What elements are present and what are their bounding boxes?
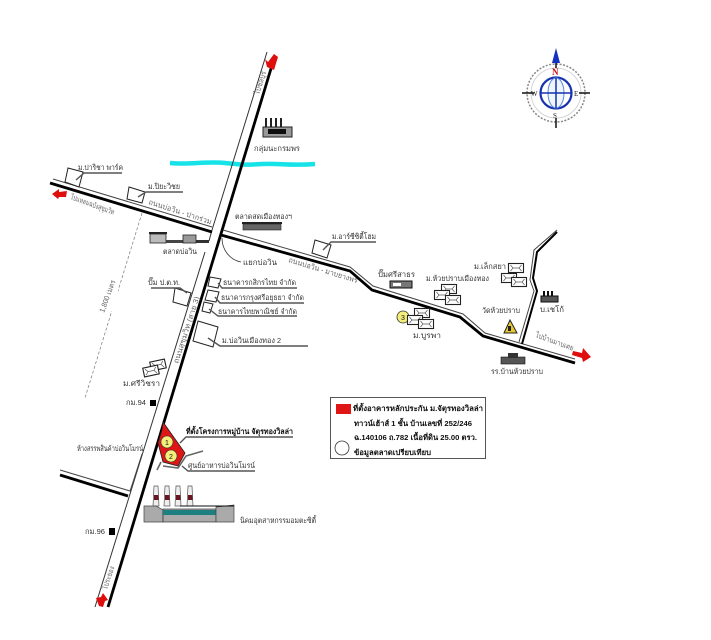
legend box bbox=[330, 398, 486, 458]
label: km 94: กม.94 bbox=[126, 398, 146, 407]
house: Paricha Park bbox=[65, 168, 83, 187]
compass bbox=[522, 48, 590, 128]
label: Amata City: นิคมอุตสาหกรรมอมตะซิตี้ bbox=[240, 515, 317, 525]
icon: school bbox=[501, 353, 525, 364]
bank: Kasikorn bbox=[208, 277, 221, 288]
marker 1: 1 bbox=[165, 440, 169, 447]
label: shopping mall: ห้างสรรพสินค้าบ่อวินโมรน์ bbox=[77, 444, 143, 453]
label: road to south: ไประยอง bbox=[100, 565, 116, 591]
label: Krungsri: ธนาคารกรุงศรีอยุธยา จำกัด bbox=[221, 293, 304, 302]
label: Bo Win market: ตลาดบ่อวิน bbox=[163, 247, 197, 256]
house: PTT station bbox=[173, 288, 191, 306]
arrow: east bbox=[572, 348, 591, 362]
dashed distance line bbox=[85, 213, 142, 398]
houses: Huai Prap Muang Thong bbox=[434, 284, 460, 304]
compass: N bbox=[552, 67, 559, 77]
leader: food centre bbox=[182, 466, 255, 471]
label: Bo Win junction: แยกบ่อวิน bbox=[243, 258, 277, 267]
icon: Muang Thong market bbox=[242, 222, 282, 230]
label: Sukhumvit highway: ถนนสุขุมวิท (สาย 3) bbox=[171, 295, 202, 365]
label: 1,800 m: 1,800 เมตร bbox=[97, 279, 118, 314]
road: main north-south highway bbox=[95, 52, 273, 607]
compass: S bbox=[553, 112, 557, 120]
label: Bo Win road west: ถนนบ่อวิน - ปากร่วม bbox=[147, 197, 213, 226]
legend: address line 3: ฉ.140106 ถ.782 เนื้อที่ดิน 25.00 ตรว. bbox=[354, 431, 477, 442]
label: PTT station: ปั๊ม ป.ต.ท. bbox=[148, 277, 180, 287]
site polygon bbox=[157, 422, 203, 470]
house: RC City Home bbox=[312, 240, 331, 258]
label: km 96: กม.96 bbox=[85, 527, 105, 536]
icon: gas station bbox=[390, 281, 412, 288]
label: factory north: กลุ่มนะกรมพร bbox=[254, 144, 300, 153]
marker 1 bbox=[161, 436, 173, 448]
legend: red swatch bbox=[336, 404, 351, 414]
label: road to Laem Chabang: ไปแหลมฉบังสุขุมวิท bbox=[69, 192, 116, 217]
label: Bo Win road east: ถนนบ่อวิน - มาบยางพร bbox=[287, 255, 359, 285]
house: Bo Win Muang Thong 2 bbox=[193, 321, 218, 347]
house: Piyawit bbox=[127, 187, 145, 203]
leader: Kasikorn bbox=[218, 283, 297, 288]
label: school: รร.บ้านห้วยปราบ bbox=[491, 367, 543, 376]
leader bbox=[76, 173, 122, 180]
icon: Cheko factory bbox=[541, 291, 558, 302]
river bbox=[170, 162, 315, 165]
road: south-west branch bbox=[60, 454, 142, 496]
legend: circle swatch bbox=[335, 441, 349, 455]
legend: address line 1: ที่ตั้งอาคารหลักประกัน ม.จัตุรทองวิลล่า bbox=[353, 402, 483, 413]
label: Wat Huai Prap: วัดห้วยปราบ bbox=[482, 306, 520, 315]
compass: E bbox=[574, 90, 578, 98]
road: west branch bbox=[50, 179, 212, 232]
marker 2 bbox=[165, 450, 177, 462]
bank: SCB bbox=[202, 302, 213, 313]
label: food centre: ศูนย์อาหารบ่อวินโมรน์ bbox=[188, 461, 255, 470]
label: Lek Saya: ม.เล็กสยา bbox=[474, 261, 506, 271]
label: road to north: ไปชลบุรี bbox=[252, 70, 268, 96]
label: project site: ที่ตั้งโครงการหมู่บ้าน จัตุรทองวิลล่า bbox=[186, 425, 293, 437]
marker 3 bbox=[397, 311, 409, 323]
road: side road to the north-east bbox=[519, 230, 557, 344]
arrow: south bbox=[96, 593, 108, 607]
marker 2: 2 bbox=[169, 454, 173, 461]
leader: SCB bbox=[209, 309, 297, 316]
compass: W bbox=[531, 90, 538, 98]
leader: PTT bbox=[151, 288, 187, 293]
label: road to Map Toei: ไปบ้านมาบเตย bbox=[534, 330, 575, 353]
marker: km 96 bbox=[109, 528, 115, 535]
label: Bo Win Muang Thong 2: ม.บ่อวินเมืองทอง 2 bbox=[222, 336, 281, 345]
label: SCB: ธนาคารไทยพาณิชย์ จำกัด bbox=[218, 307, 297, 316]
label: Muang Thong market: ตลาดสดเมืองทองฯ bbox=[235, 212, 292, 221]
label: Burapha: ม.บูรพา bbox=[413, 331, 441, 340]
arrow: Bo Win junction bbox=[222, 238, 241, 262]
label: RC City Home: ม.อาร์ซีซิตี้โฮม bbox=[332, 231, 376, 241]
icon: factory north bbox=[263, 118, 292, 137]
icon: industrial estate bbox=[144, 486, 234, 522]
houses: Sriwichai bbox=[143, 359, 166, 377]
label: Sriwichai: ม.ศรีวิชรา bbox=[123, 379, 160, 388]
icon: Bo Win market bbox=[149, 232, 209, 243]
leader: RC City Home bbox=[323, 242, 376, 250]
label: Paricha Park: ม.ปาริชา พาร์ค bbox=[78, 163, 123, 172]
houses: Burapha bbox=[408, 308, 434, 328]
icon: temple bbox=[504, 320, 517, 333]
label: Kasikorn: ธนาคารกสิกรไทย จำกัด bbox=[223, 278, 296, 287]
marker 3: 3 bbox=[401, 315, 405, 322]
arrow: north bbox=[265, 54, 278, 70]
houses: Lek Saya bbox=[502, 264, 526, 286]
leader: Krungsri bbox=[215, 297, 304, 303]
legend: address line 2: ทาวน์เฮ้าส์ 1 ชั้น บ้านเลขที่ 252/246 bbox=[354, 417, 472, 428]
road: east branch bbox=[221, 230, 575, 363]
bank: Krungsri bbox=[205, 290, 219, 302]
label: Piyawit: ม.ปิยะวิชย bbox=[148, 182, 180, 191]
leader: Bo Win Muang Thong 2 bbox=[208, 338, 308, 346]
leader bbox=[138, 192, 183, 197]
marker: km 94 bbox=[150, 400, 156, 406]
legend: comparison data: ข้อมูลตลาดเปรียบเทียบ bbox=[354, 448, 431, 458]
leader: project site bbox=[180, 437, 293, 443]
label: gas station: ปั๊มศรีสาธร bbox=[378, 269, 415, 279]
label gap: distance bbox=[100, 283, 118, 311]
label: Huai Prap Muang Thong: ม.ห้วยปราบเมืองทอง bbox=[426, 274, 489, 283]
arrow: west bbox=[52, 189, 67, 199]
label: Cheko: บ.เชโก้ bbox=[540, 305, 564, 314]
